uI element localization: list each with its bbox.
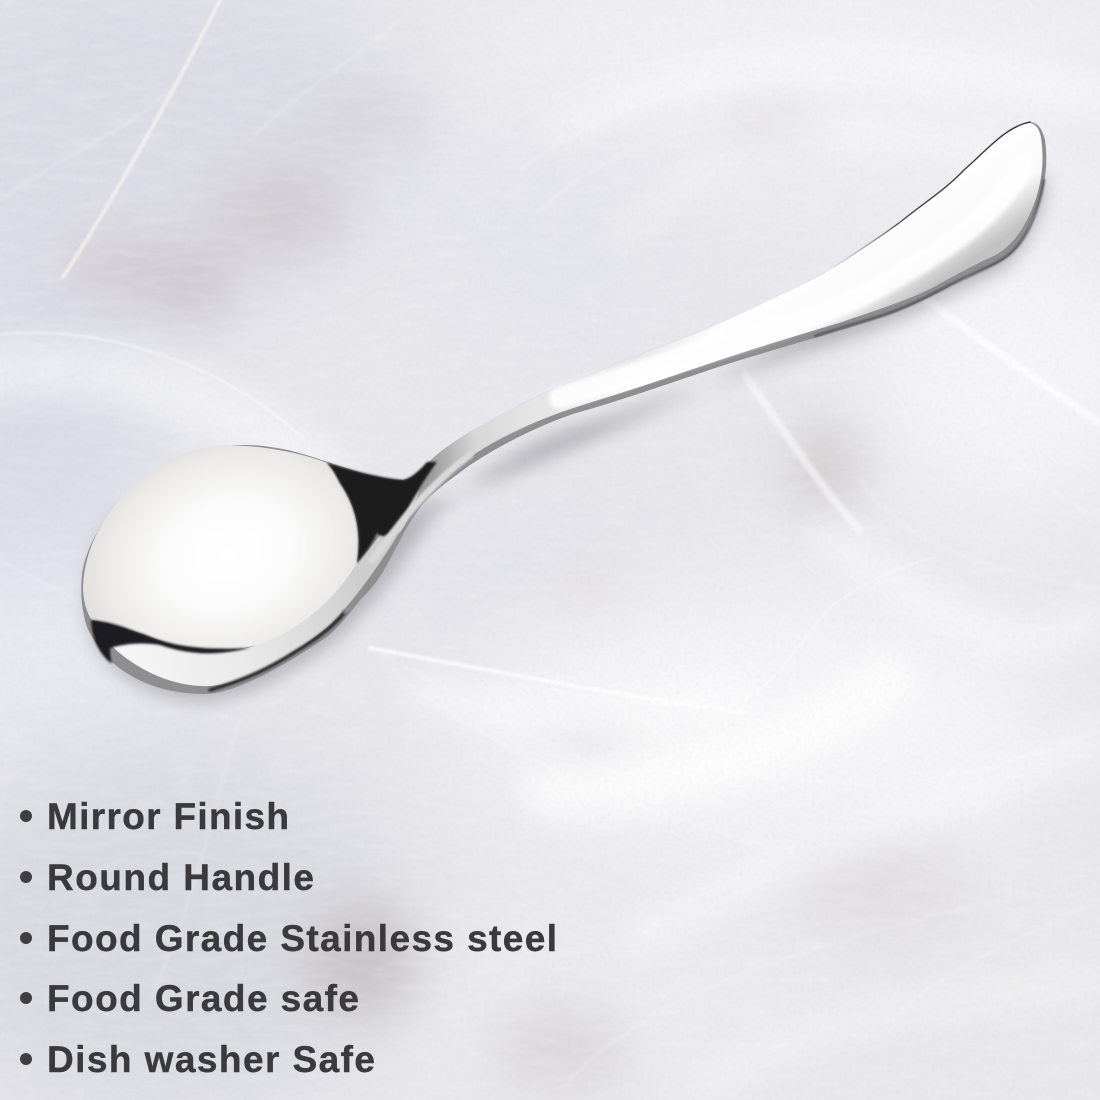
lower dark reflection — [91, 620, 250, 664]
rim dark edge — [210, 612, 345, 690]
handle top dark edge — [834, 122, 1030, 267]
spoon lip — [92, 490, 420, 686]
handle shine — [560, 165, 1022, 398]
feature: Food Grade Stainless steel: Food Grade Stainless steel — [47, 918, 557, 959]
handle highlight — [428, 123, 1042, 485]
neck shading — [400, 400, 548, 530]
feature: Round Handle: Round Handle — [47, 857, 314, 898]
bowl interior — [83, 445, 359, 651]
spoon silhouette — [81, 122, 1046, 694]
spoon shadow — [86, 170, 1046, 701]
spoon — [81, 122, 1046, 701]
feature list — [20, 796, 557, 1080]
rim right edge — [345, 535, 400, 612]
handle lower dark edge — [815, 180, 1044, 336]
feature: Food Grade safe: Food Grade safe — [47, 978, 359, 1019]
bowl dark reflection — [327, 462, 437, 563]
feature: Mirror Finish: Mirror Finish — [47, 796, 289, 837]
neck highlight — [372, 455, 470, 560]
feature: Dish washer Safe: Dish washer Safe — [47, 1039, 375, 1080]
